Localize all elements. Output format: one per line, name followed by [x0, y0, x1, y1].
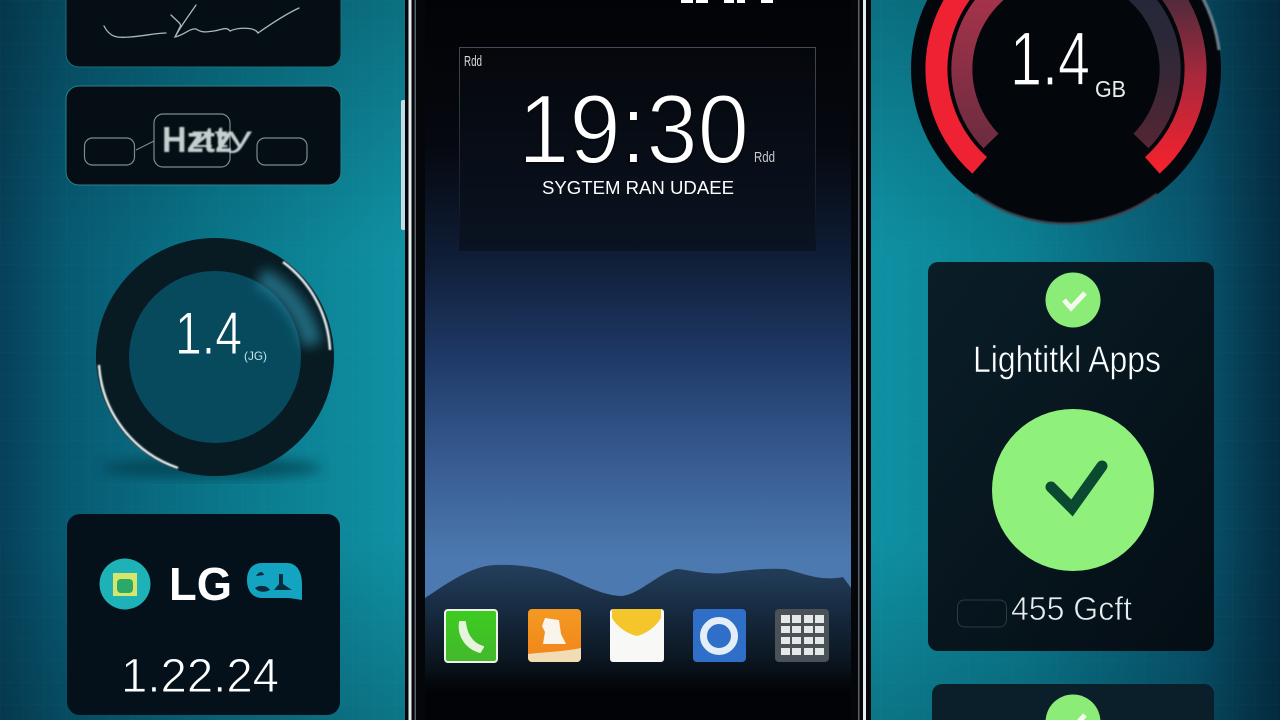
icon: large check: [992, 409, 1154, 571]
circular gauge: left: [96, 238, 334, 478]
version number: 1.22.24: [121, 650, 279, 703]
icon: browser app: [693, 609, 746, 662]
red gauge: right: [911, 0, 1221, 224]
signature scribble: [104, 5, 299, 37]
card value: 455 Gcft: [1011, 590, 1132, 627]
icon: contacts app: [528, 609, 581, 662]
central chip: [154, 114, 230, 167]
clock time: 19:30: [518, 74, 749, 184]
panel: lower apps card: [932, 684, 1214, 720]
status bar: [681, 0, 773, 3]
gauge unit: GB: [1095, 76, 1126, 102]
icon: small check: [1046, 694, 1100, 720]
garbled chip label: Hztz: [162, 119, 232, 160]
right chip: [257, 138, 307, 165]
widget tag: Rdd: [464, 53, 482, 70]
side button: [401, 100, 406, 230]
widget caption: SYGTEM RAN UDAEE: [542, 177, 734, 198]
gauge value: 1.4: [175, 300, 242, 367]
phone: [401, 0, 871, 720]
icon: teal badge: [100, 558, 150, 610]
gauge unit: (JG): [244, 349, 267, 363]
garbled chip label: zty: [190, 121, 252, 154]
panel: clock widget: [459, 47, 816, 251]
red arc: outer left: [936, 0, 1066, 165]
icon: small check: [1046, 272, 1100, 328]
screen wallpaper: [425, 0, 851, 720]
clock suffix: Rdd: [754, 149, 775, 166]
icon: phone app: [445, 610, 497, 662]
red arc: inner right: [1092, 0, 1170, 141]
panel: signature card: [66, 0, 341, 67]
mountains: [425, 565, 851, 720]
phone body: [405, 0, 871, 720]
panel: LG version card: [67, 514, 340, 715]
icon: mail app: [610, 609, 664, 662]
icon: speech bubble: [247, 563, 302, 600]
red arc: outer right: [1066, 0, 1196, 165]
icon: apps grid: [775, 609, 829, 662]
panel: lightweight apps card: [928, 262, 1214, 651]
gauge value: 1.4: [1010, 17, 1090, 102]
red arc: inner left: [962, 0, 1040, 141]
left chip: [84, 138, 134, 165]
empty pill: [958, 600, 1006, 627]
connector: [136, 141, 154, 150]
panel: memory diagram card: [66, 86, 341, 185]
card heading: Lightitkl Apps: [973, 339, 1161, 380]
brand name: LG: [169, 558, 232, 610]
